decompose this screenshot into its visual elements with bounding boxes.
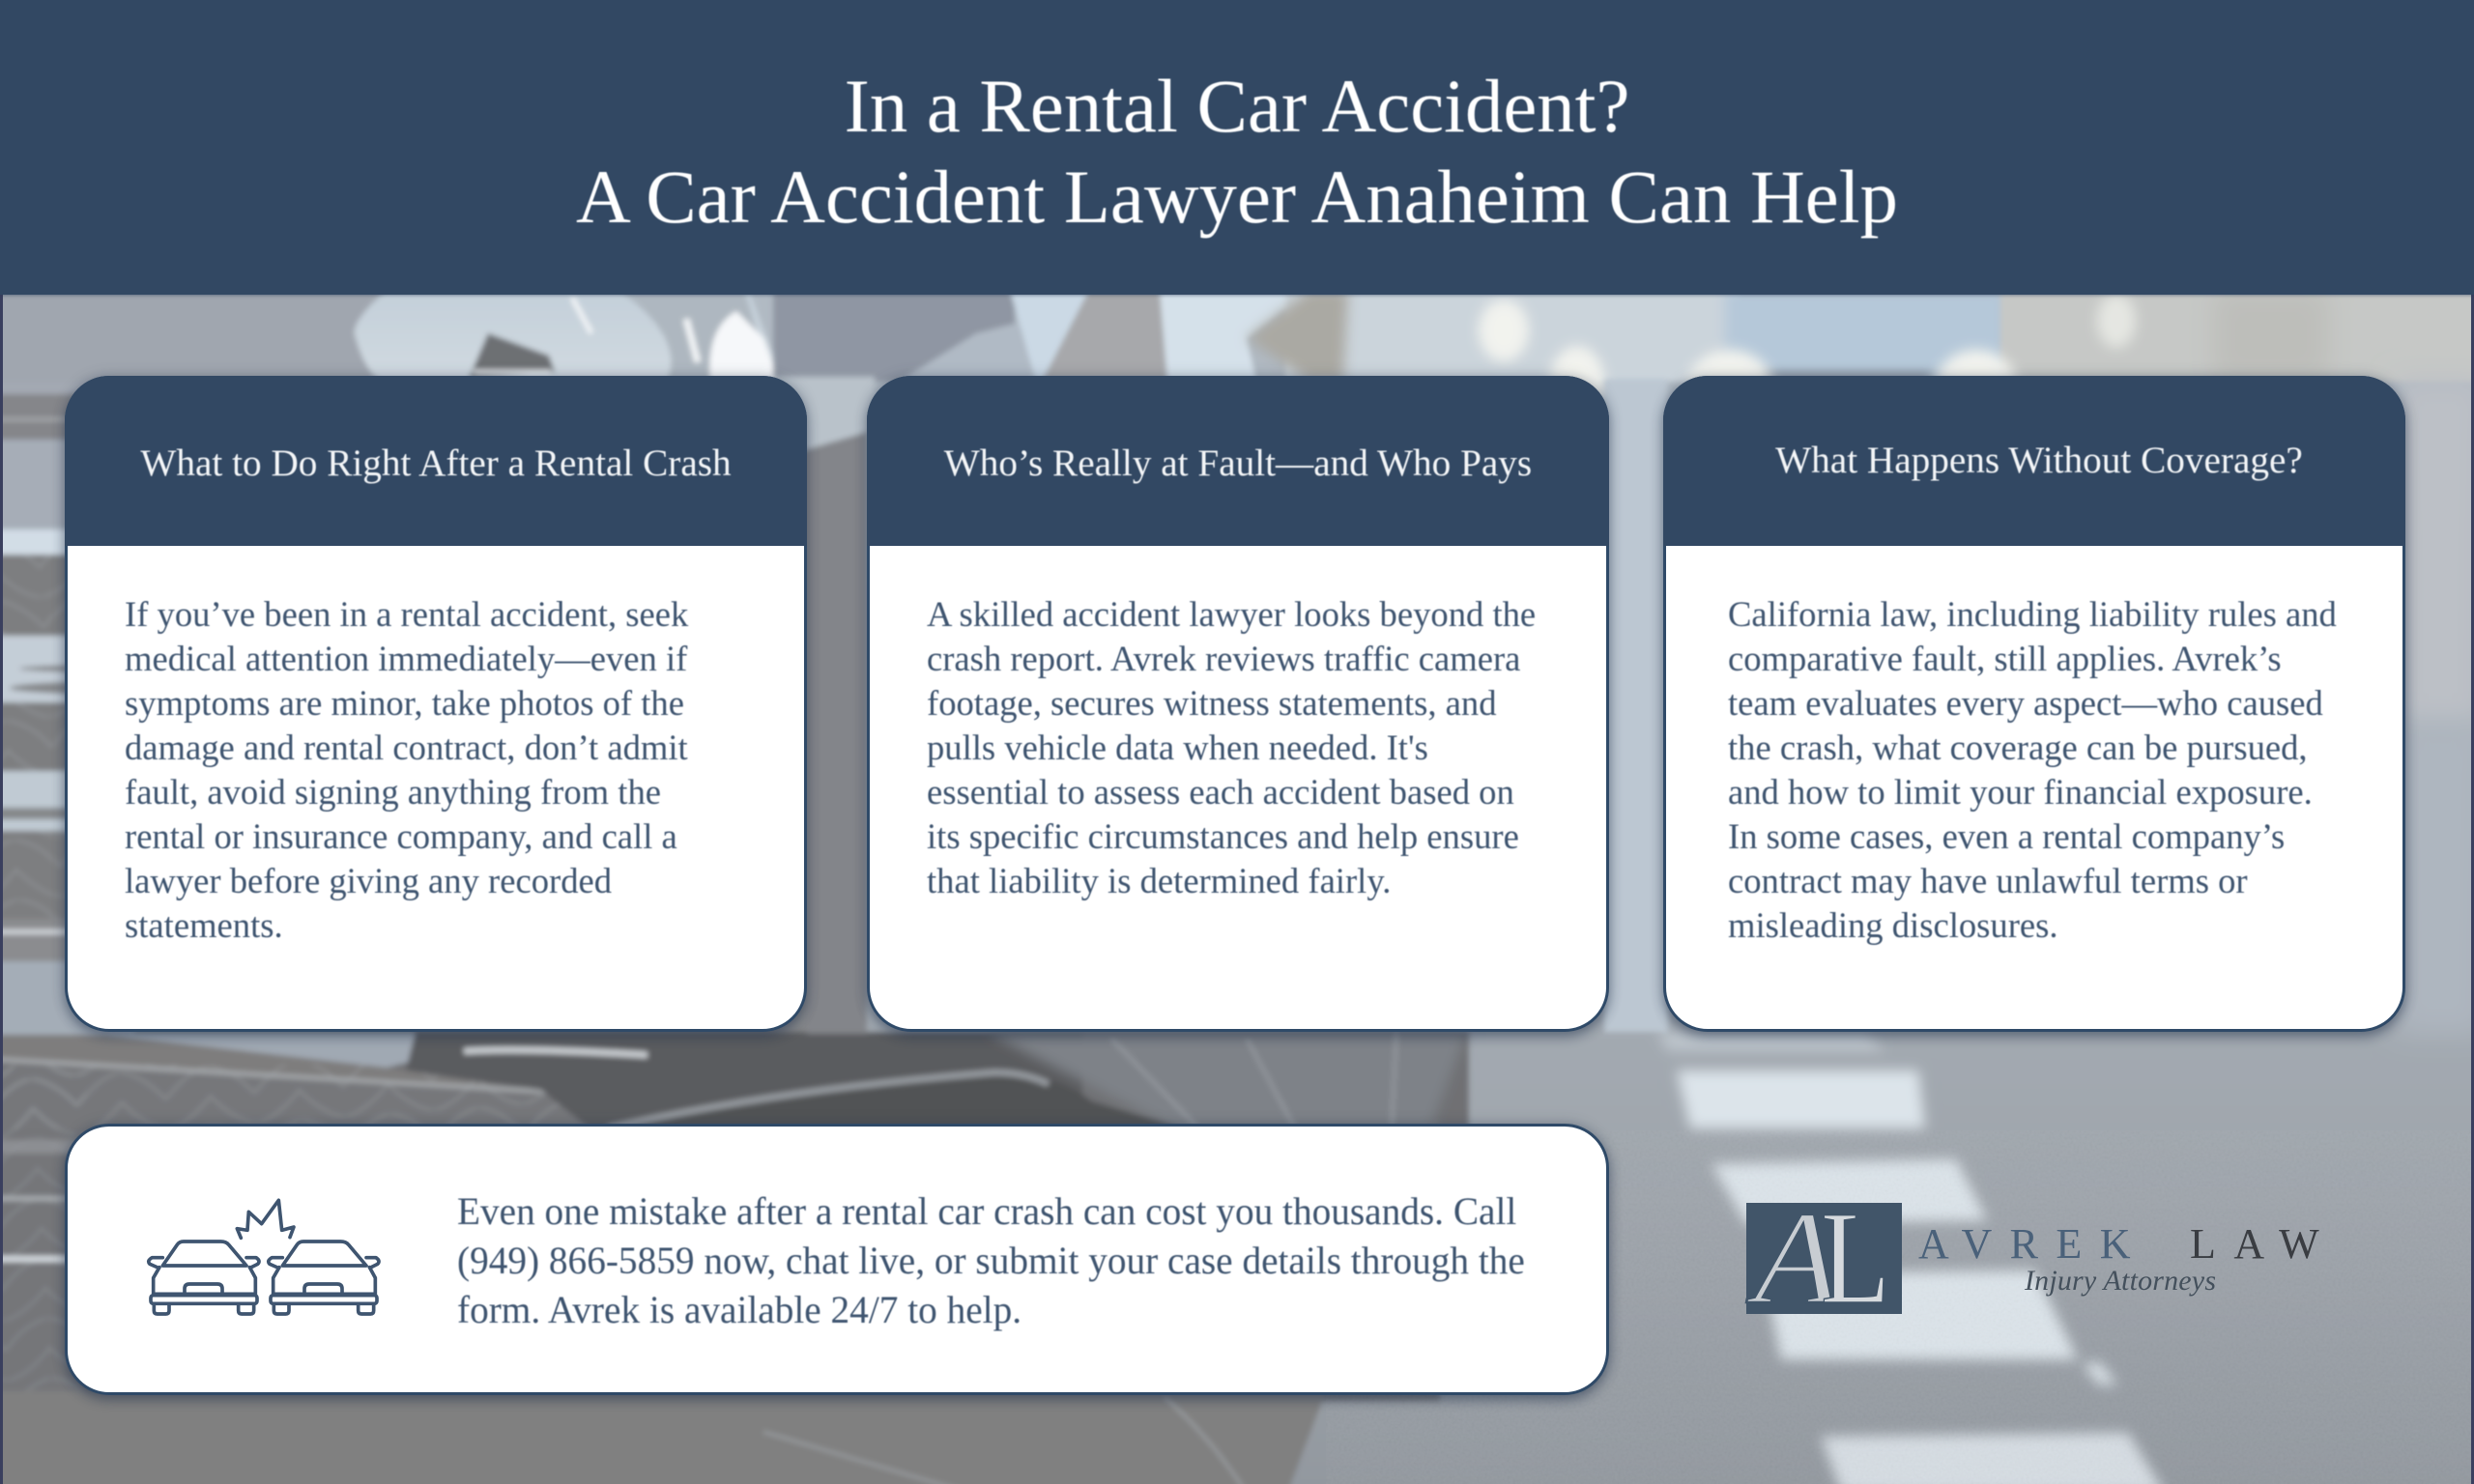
title: In a Rental Car Accident?	[845, 65, 1629, 149]
call to action text: (949) 866-5859 now, chat live, or submit your case details through the	[457, 1239, 1525, 1282]
logo wordmark: Injury Attorneys	[2024, 1265, 2216, 1297]
body text: A skilled accident lawyer looks beyond the	[926, 595, 1536, 635]
body text	[926, 595, 1536, 901]
panel heading	[867, 376, 1609, 546]
logo mark	[1746, 1184, 1902, 1331]
left grille and chrome bands	[0, 295, 242, 1391]
icon: two cars colliding	[147, 1198, 381, 1316]
body text: lawyer before giving any recorded	[125, 862, 612, 901]
panel: what happens without coverage	[1663, 376, 2405, 1032]
logo wordmark: LAW	[2190, 1220, 2337, 1268]
call to action text	[457, 1189, 1525, 1331]
call to action text: Even one mistake after a rental car crash can cost you thousands. Call	[457, 1189, 1516, 1233]
body text: its specific circumstances and help ensure	[926, 817, 1518, 857]
panel heading	[65, 376, 807, 546]
body text: statements.	[125, 906, 283, 946]
body text: symptoms are minor, take photos of the	[125, 684, 684, 724]
panel: call to action	[65, 1124, 1609, 1395]
body text: rental or insurance company, and call a	[125, 817, 677, 857]
body text: damage and rental contract, don’t admit	[125, 728, 688, 768]
header banner	[0, 0, 2474, 295]
title	[576, 65, 1898, 240]
panel heading	[1663, 376, 2405, 546]
body text: misleading disclosures.	[1728, 906, 2058, 946]
title: A Car Accident Lawyer Anaheim Can Help	[576, 156, 1898, 240]
crashed car body	[0, 377, 1469, 1484]
panel: what to do right after a rental crash	[65, 376, 807, 1032]
gaps between cards	[773, 377, 2474, 1034]
body text: footage, secures witness statements, and	[926, 684, 1496, 724]
body text	[125, 595, 689, 946]
body text: the crash, what coverage can be pursued,	[1728, 728, 2308, 768]
logo wordmark: AVREK	[1918, 1220, 2148, 1268]
body text: If you’ve been in a rental accident, seek	[125, 595, 688, 635]
top strip: cracked hood	[0, 290, 2474, 423]
body text: contract may have unlawful terms or	[1728, 862, 2248, 901]
panel heading: What Happens Without Coverage?	[1775, 440, 2303, 481]
body text: fault, avoid signing anything from the	[125, 773, 661, 813]
body text: crash report. Avrek reviews traffic camera	[926, 640, 1520, 679]
body text: and how to limit your financial exposure.	[1728, 773, 2313, 813]
asphalt texture	[1326, 1130, 2474, 1484]
panel: who's really at fault	[867, 376, 1609, 1032]
body text: In some cases, even a rental company’s	[1728, 817, 2285, 857]
body text: California law, including liability rules and	[1728, 595, 2337, 635]
body text: comparative fault, still applies. Avrek’s	[1728, 640, 2282, 679]
body text: medical attention immediately—even if	[125, 640, 687, 679]
body text	[1728, 595, 2337, 946]
panel heading: Who’s Really at Fault—and Who Pays	[944, 442, 1532, 484]
body text: that liability is determined fairly.	[926, 862, 1391, 901]
left edge	[0, 0, 3, 1484]
logo: Avrek Law Injury Attorneys	[1745, 1198, 2337, 1319]
call to action text: form. Avrek is available 24/7 to help.	[457, 1288, 1021, 1331]
body text: essential to assess each accident based on	[926, 773, 1513, 813]
body text: pulls vehicle data when needed. It's	[926, 728, 1427, 768]
logo wordmark	[1918, 1220, 2337, 1297]
right edge	[2471, 0, 2474, 1484]
body text: team evaluates every aspect—who caused	[1728, 684, 2323, 724]
panel heading: What to Do Right After a Rental Crash	[140, 442, 732, 484]
